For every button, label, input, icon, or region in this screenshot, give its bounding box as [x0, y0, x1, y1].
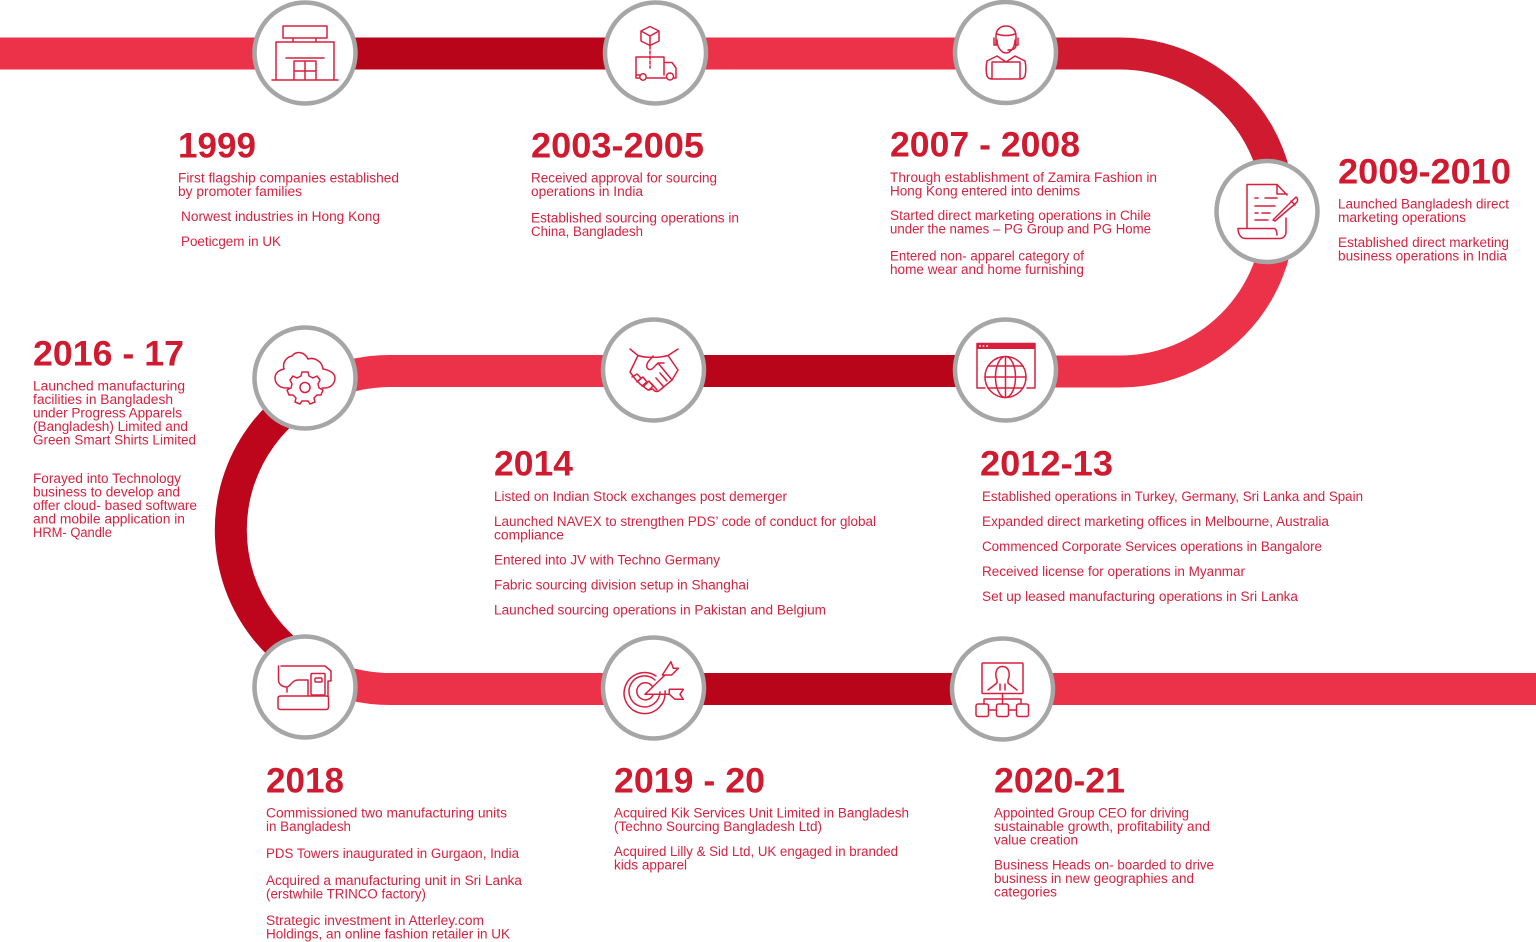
- text: 2014 details: Launched sourcing operations in Pakistan and Belgium: [494, 602, 826, 618]
- text: 1999 details: First flagship companies established: [178, 170, 399, 186]
- heading: 2014: 2014: [494, 444, 574, 484]
- text: 2020-21 details: Business Heads on- boarded to drive: [994, 858, 1214, 872]
- text: 2012-13 details: [982, 489, 1363, 604]
- heading: 2003-2005: 2003-2005: [531, 126, 704, 166]
- heading: 2019 - 20: 2019 - 20: [614, 762, 765, 800]
- text: 2018 details: Holdings, an online fashion retailer in UK: [266, 926, 510, 942]
- heading: 1999: 1999: [178, 126, 256, 166]
- text: 2014 details: compliance: [494, 528, 564, 542]
- milestone 2018: [254, 636, 522, 942]
- text: 2009-2010 details: business operations in India: [1338, 248, 1507, 264]
- text: 2018 details: PDS Towers inaugurated in Gurgaon, India: [266, 846, 519, 861]
- text: 2018 details: [266, 806, 522, 942]
- text: 2018 details: Commissioned two manufacturing units: [266, 806, 507, 820]
- text: 2019-20 details: (Techno Sourcing Bangladesh Ltd): [614, 819, 822, 834]
- milestone 1999: [178, 2, 399, 249]
- icon: sewing machine: [254, 636, 356, 738]
- text: 2016-17 details: HRM- Qandle: [33, 525, 112, 540]
- milestone 2009-2010: [1216, 152, 1511, 264]
- icon: leader and organisation chart: [952, 638, 1053, 740]
- text: 2016-17 details: (Bangladesh) Limited and: [33, 419, 188, 434]
- icon: browser window with globe: [955, 320, 1056, 420]
- text: 2012-13 details: Established operations in Turkey, Germany, Sri Lanka and Spain: [982, 489, 1363, 504]
- text: 2016-17 details: Launched manufacturing: [33, 378, 185, 394]
- text: 2016-17 details: facilities in Bangladesh: [33, 392, 173, 407]
- text: 2007-2008 details: [890, 170, 1157, 277]
- text: 2018 details: Acquired a manufacturing unit in Sri Lanka: [266, 873, 522, 888]
- text: 2007-2008 details: under the names – PG Group and PG Home: [890, 222, 1151, 236]
- icon: storefront: [254, 2, 356, 104]
- text: 2019-20 details: kids apparel: [614, 858, 687, 872]
- milestone 2016-17: [33, 328, 356, 540]
- text: 2020-21 details: business in new geographies and: [994, 871, 1194, 886]
- text: 2019-20 details: [614, 806, 909, 872]
- milestone 2007-2008: [890, 2, 1157, 277]
- text: 2020-21 details: value creation: [994, 832, 1078, 848]
- text: 2018 details: (erstwhile TRINCO factory): [266, 886, 426, 902]
- text: 2003-2005 details: operations in India: [531, 184, 643, 199]
- text: 2020-21 details: sustainable growth, profitability and: [994, 819, 1210, 834]
- heading: 2012-13: 2012-13: [980, 444, 1113, 484]
- text: 2009-2010 details: marketing operations: [1338, 210, 1466, 225]
- text: 2003-2005 details: China, Bangladesh: [531, 224, 643, 239]
- text: 1999 details: [178, 170, 399, 249]
- text: 2014 details: Listed on Indian Stock exchanges post demerger: [494, 489, 787, 504]
- icon: handshake: [603, 320, 704, 420]
- text: 2019-20 details: Acquired Lilly & Sid Ltd, UK engaged in branded: [614, 844, 898, 859]
- text: 2018 details: in Bangladesh: [266, 819, 351, 834]
- text: 2020-21 details: [994, 806, 1214, 900]
- text: 2012-13 details: Expanded direct marketing offices in Melbourne, Australia: [982, 514, 1329, 529]
- text: 2016-17 details: business to develop and: [33, 484, 180, 500]
- milestone 2020-21: [952, 638, 1214, 900]
- text: 2016-17 details: Forayed into Technology: [33, 471, 181, 486]
- text: 2003-2005 details: Received approval for sourcing: [531, 170, 717, 186]
- text: 2007-2008 details: Entered non- apparel category of: [890, 248, 1084, 264]
- heading: 2007 - 2008: 2007 - 2008: [890, 126, 1080, 164]
- text: 2016-17 details: under Progress Apparels: [33, 406, 182, 420]
- milestone 2019-20: [603, 638, 909, 872]
- text: 2009-2010 details: Established direct marketing: [1338, 235, 1509, 250]
- text: 2012-13 details: Set up leased manufacturing operations in Sri Lanka: [982, 589, 1298, 604]
- text: 2019-20 details: Acquired Kik Services Unit Limited in Bangladesh: [614, 806, 909, 820]
- text: 2014 details: Fabric sourcing division setup in Shanghai: [494, 578, 749, 592]
- text: 2007-2008 details: Started direct marketing operations in Chile: [890, 208, 1151, 223]
- text: 2012-13 details: Received license for operations in Myanmar: [982, 564, 1246, 579]
- text: 1999 details: by promoter families: [178, 184, 302, 199]
- heading: 2018: 2018: [266, 762, 344, 800]
- icon: parcel and delivery truck: [605, 2, 706, 104]
- text: 2007-2008 details: Hong Kong entered into denims: [890, 184, 1080, 198]
- heading: 2016 - 17: 2016 - 17: [33, 334, 184, 374]
- text: 2014 details: Launched NAVEX to strengthen PDS’ code of conduct for global: [494, 514, 876, 529]
- text: 2020-21 details: categories: [994, 884, 1057, 900]
- text: 2016-17 details: Green Smart Shirts Limited: [33, 432, 196, 448]
- text: 1999 details: Poeticgem in UK: [181, 234, 281, 249]
- text: 2007-2008 details: home wear and home furnishing: [890, 262, 1084, 277]
- text: 2009-2010 details: [1338, 196, 1509, 264]
- icon: cloud with gear: [254, 328, 356, 428]
- text: 2014 details: Entered into JV with Techno Germany: [494, 552, 720, 568]
- text: 2003-2005 details: Established sourcing operations in: [531, 210, 739, 226]
- milestone 2014: [494, 320, 876, 618]
- icon: document and pen: [1216, 161, 1318, 262]
- text: 2014 details: [494, 489, 876, 618]
- text: 2016-17 details: [33, 378, 197, 540]
- text: 1999 details: Norwest industries in Hong Kong: [181, 209, 380, 224]
- heading: 2009-2010: 2009-2010: [1338, 152, 1511, 192]
- text: 2003-2005 details: [531, 170, 739, 239]
- text: 2016-17 details: offer cloud- based software: [33, 498, 197, 513]
- text: 2018 details: Strategic investment in Atterley.com: [266, 913, 484, 928]
- heading: 2020-21: 2020-21: [994, 762, 1125, 800]
- text: 2012-13 details: Commenced Corporate Services operations in Bangalore: [982, 539, 1322, 554]
- milestone 2003-2005: [531, 2, 739, 239]
- text: 2009-2010 details: Launched Bangladesh direct: [1338, 196, 1509, 212]
- timeline ribbon: [0, 54, 1536, 689]
- text: 2007-2008 details: Through establishment of Zamira Fashion in: [890, 170, 1157, 185]
- milestone 2012-13: [955, 320, 1363, 604]
- icon: target with arrows: [603, 638, 704, 738]
- icon: person with headset and laptop: [955, 2, 1056, 103]
- text: 2016-17 details: and mobile application in: [33, 512, 185, 526]
- text: 2020-21 details: Appointed Group CEO for driving: [994, 806, 1189, 820]
